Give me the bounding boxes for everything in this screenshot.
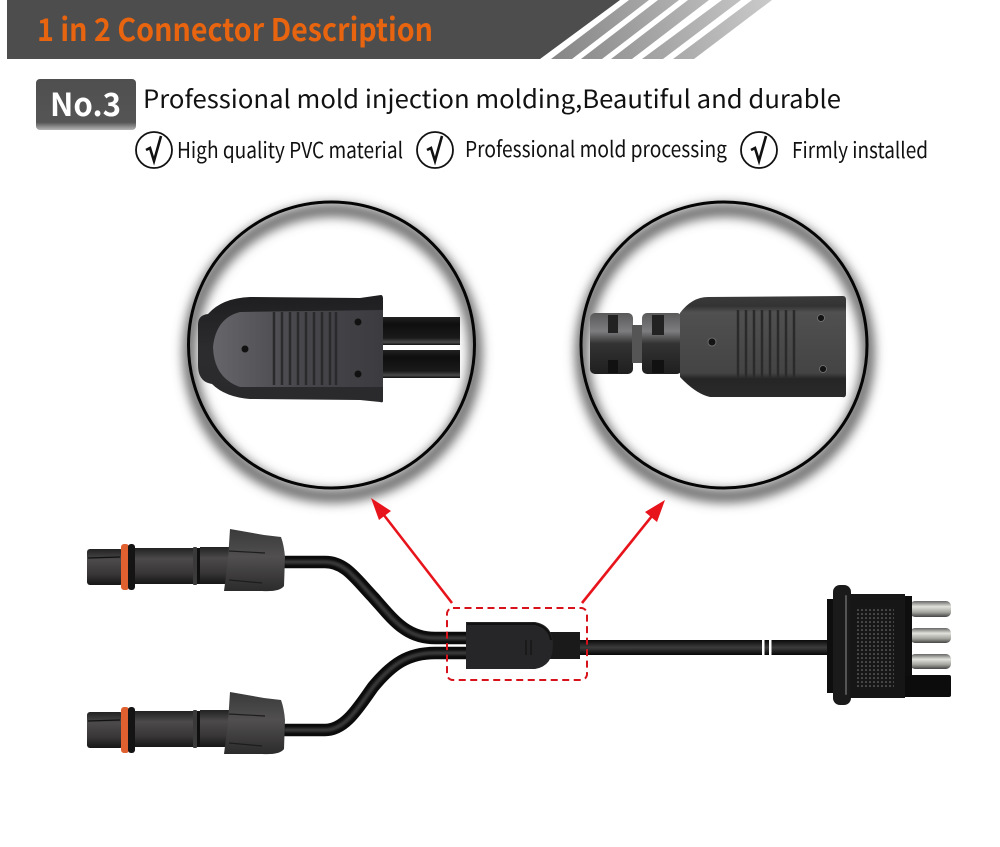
dashed highlight box: [447, 608, 587, 680]
badge: No.3: [36, 79, 136, 130]
feature: firmly installed: Firmly installed: [792, 133, 928, 165]
textured panel: [213, 310, 383, 387]
feature: professional mold processing: [417, 132, 728, 168]
decorative slanted stripes: [551, 0, 772, 59]
dotted grip: [857, 607, 894, 687]
feature: firmly installed: [741, 132, 928, 168]
lower waterproof connector: [87, 692, 285, 754]
subheading: Professional mold injection molding,Beautiful and durable: [143, 80, 841, 116]
feature: high quality PVC material: High quality PVC material: [177, 133, 403, 165]
twin cables: [380, 317, 460, 378]
mould marks: [242, 318, 362, 378]
main cable: [575, 638, 830, 657]
arrow to left circle: [371, 498, 452, 603]
badge: No.3: No.3: [50, 80, 121, 126]
grip ribs: [274, 312, 336, 385]
header banner: [7, 0, 772, 59]
magnified circle: splitter end with two cables: [188, 202, 476, 496]
mould marks: [708, 314, 826, 372]
feature: professional mold processing: Professional mold processing: [465, 132, 728, 164]
title: 1 in 2 Connector Description: [37, 5, 433, 50]
magnified circle: single cable end: [581, 202, 868, 496]
arrow to right circle: [582, 500, 665, 603]
metal pins: [910, 601, 951, 669]
upper waterproof connector: [87, 529, 285, 591]
moulded body: [680, 296, 846, 397]
grip ribs: [738, 310, 794, 377]
moulded shell: [198, 295, 383, 402]
Y-splitter moulding: [466, 622, 580, 669]
split cables: [284, 562, 470, 730]
feature: high quality PVC material: [136, 132, 403, 168]
4-pin flat trailer plug: [827, 585, 951, 705]
ribbed neck: [590, 313, 682, 374]
